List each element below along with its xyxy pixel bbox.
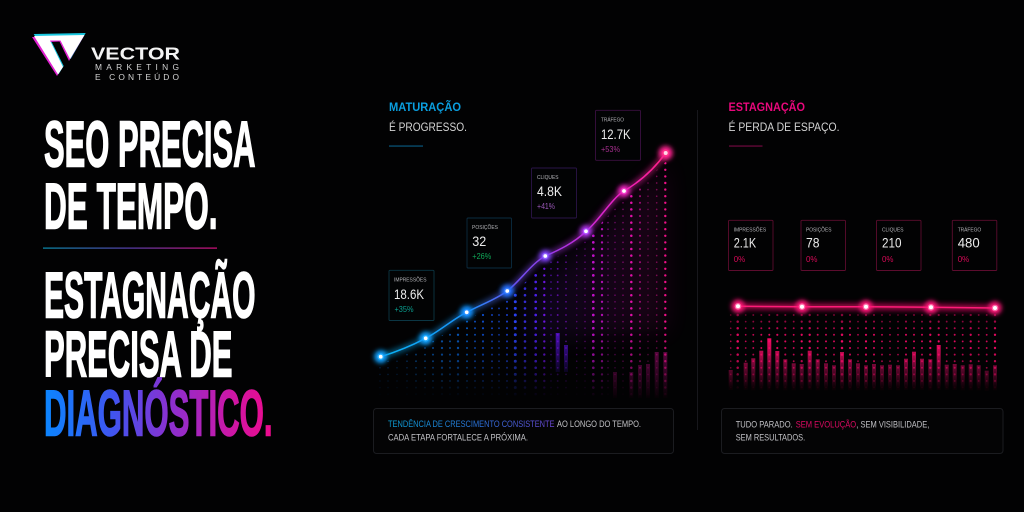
- card: tráfego: [596, 110, 640, 160]
- callout: tudo parado: , SEM VISIBILIDADE,: [856, 419, 929, 429]
- text: ESTAGNAÇÃO: [44, 258, 256, 332]
- card: tráfego: TRÁFEGO: [601, 116, 624, 124]
- card: posições: [467, 218, 512, 268]
- line nodes: [732, 300, 1002, 314]
- card: tráfego: 12.7K: [601, 126, 631, 142]
- panel divider: [697, 110, 698, 430]
- callout: tudo parado: SEM RESULTADOS.: [736, 432, 805, 442]
- heading: SEO precisa de tempo: [44, 108, 256, 242]
- card: cliques: [876, 220, 921, 270]
- chart glow: [530, 165, 666, 340]
- card: impressões: [728, 220, 773, 270]
- curve nodes: [374, 146, 673, 363]
- card: cliques: CLIQUES: [537, 175, 559, 181]
- card: posições: +26%: [472, 251, 492, 261]
- chart dot matrix: [380, 150, 665, 398]
- card: impressões: IMPRESSÕES: [734, 226, 767, 233]
- panel heading: maturação: [389, 99, 467, 147]
- card: posições: [801, 220, 846, 270]
- panel heading: maturação: É PROGRESSO.: [389, 119, 467, 134]
- icon: logo triangle: [32, 33, 86, 76]
- chart dot matrix: [731, 315, 995, 388]
- card: cliques: 0%: [882, 254, 894, 264]
- card: posições: 0%: [806, 254, 818, 264]
- callout: tudo parado: SEM EVOLUÇÃO: [796, 419, 856, 429]
- panel: estagnação: [722, 99, 1003, 454]
- chart bars: [556, 333, 667, 398]
- card: impressões: 0%: [734, 254, 746, 264]
- text: SEO PRECISA: [44, 108, 256, 180]
- callout: tudo parado: [722, 408, 1003, 454]
- growth curve: [381, 153, 666, 357]
- callout: tendência de crescimento: TENDÊNCIA DE CRESCIMENTO CONSISTENTE: [388, 419, 555, 429]
- card: impressões: IMPRESSÕES: [394, 276, 427, 284]
- card: impressões: [389, 270, 434, 320]
- card: tráfego: TRÁFEGO: [958, 226, 981, 233]
- heading: Estagnação precisa de diagnóstico: PRECISA DE: [44, 318, 232, 390]
- card: posições: POSIÇÕES: [806, 226, 832, 233]
- callout: tendência de crescimento: CADA ETAPA FORTALECE A PRÓXIMA.: [388, 432, 528, 442]
- text: DIAGNÓSTICO.: [44, 376, 272, 450]
- logo tagline line 1: MARKETING: [95, 62, 179, 72]
- panel heading: estagnação: É PERDA DE ESPAÇO.: [728, 119, 840, 134]
- card: tráfego: 0%: [958, 254, 970, 264]
- card: cliques: +41%: [537, 201, 555, 211]
- growth chart: [374, 146, 673, 398]
- panel heading: estagnação: [728, 99, 840, 147]
- logo: Vector Marketing e Conteúdo: [32, 33, 180, 82]
- gradient divider: [43, 248, 217, 249]
- logo wordmark: VECTOR: [91, 44, 180, 64]
- card: cliques: 4.8K: [537, 183, 563, 199]
- card: impressões: +35%: [394, 304, 414, 314]
- card: posições: 32: [472, 233, 486, 249]
- card: tráfego: +53%: [601, 144, 620, 154]
- panel heading: estagnação: ESTAGNAÇÃO: [728, 99, 805, 114]
- flat line: [738, 306, 995, 308]
- card: tráfego: 480: [958, 235, 980, 251]
- heading: SEO precisa de tempo: DE TEMPO.: [44, 170, 218, 242]
- chart bars: [729, 338, 997, 391]
- card: impressões: 2.1K: [734, 235, 757, 251]
- heading: Estagnação precisa de diagnóstico: [44, 258, 272, 450]
- card: tráfego: [952, 220, 997, 270]
- logo tagline line 2: E CONTEÚDO: [95, 72, 179, 82]
- callout: tendência de crescimento: [374, 408, 674, 454]
- card: posições: 78: [806, 235, 820, 251]
- flat chart: [729, 300, 1002, 391]
- card: posições: POSIÇÕES: [472, 224, 498, 231]
- card: cliques: [532, 168, 576, 218]
- card: impressões: 18.6K: [394, 286, 425, 302]
- card: cliques: CLIQUES: [882, 227, 904, 233]
- callout: tudo parado: TUDO PARADO.: [736, 419, 793, 429]
- panel heading: maturação: MATURAÇÃO: [389, 99, 461, 114]
- curve glow: [381, 153, 666, 357]
- callout: tendência de crescimento: AO LONGO DO TEMPO.: [557, 419, 641, 429]
- panel: maturação: [374, 99, 674, 454]
- line glow: [738, 306, 995, 308]
- card: cliques: 210: [882, 235, 902, 251]
